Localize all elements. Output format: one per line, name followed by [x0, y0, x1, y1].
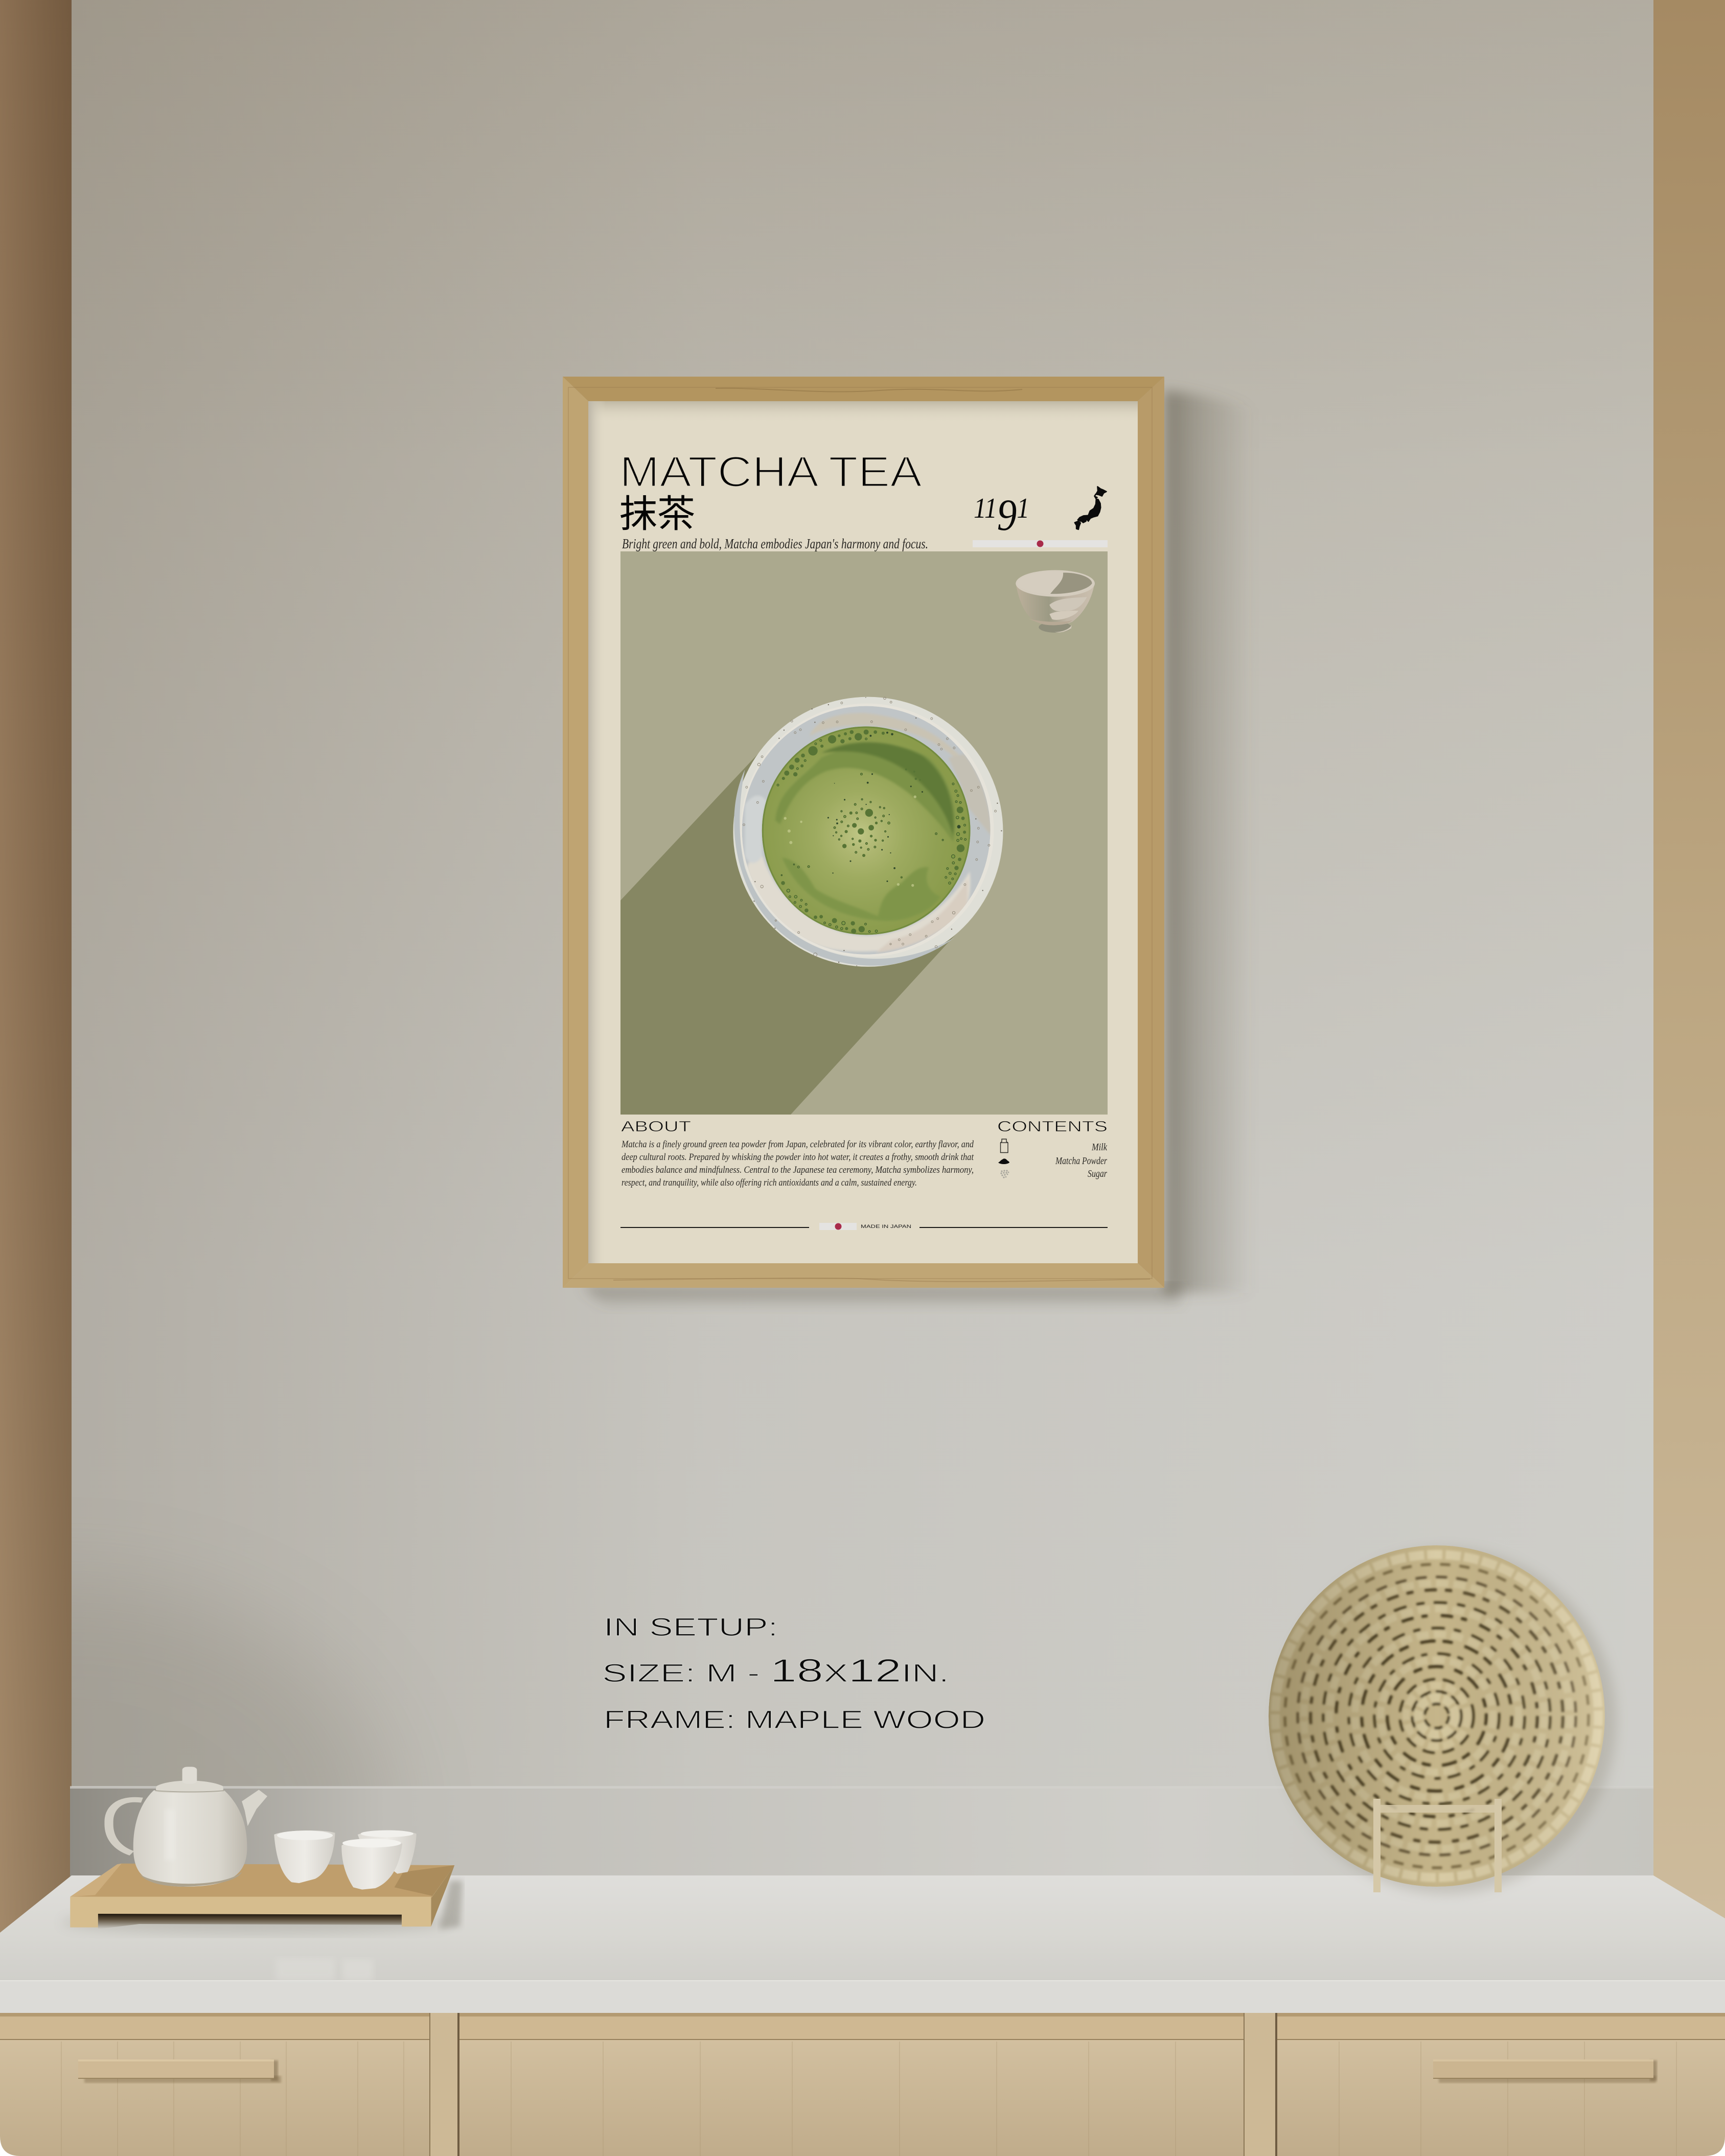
about paragraph: embodies balance and mindfulness. Central to the Japanese tea ceremony, Matcha symbolizes harmony,	[622, 1165, 974, 1175]
backsplash	[70, 1786, 1653, 1877]
contents heading: CONTENTS	[997, 1119, 1108, 1135]
woven basket	[1245, 1524, 1628, 1908]
icon: side view bowl	[1016, 570, 1095, 633]
bowl inner well	[742, 706, 992, 955]
contents list: Milk	[1091, 1142, 1108, 1153]
setup caption: FRAME: MAPLE WOOD	[604, 1705, 985, 1734]
right wooden pillar	[1653, 0, 1725, 1918]
bottom rounded corners	[0, 2136, 1725, 2156]
teapot	[109, 1767, 267, 1887]
about paragraph: respect, and tranquility, while also offering rich antioxidants and a calm, sustained energy.	[622, 1177, 917, 1188]
year: 11	[974, 493, 1000, 524]
left wooden pillar	[0, 0, 72, 1933]
about paragraph	[621, 1139, 974, 1188]
wooden picture frame	[563, 377, 1164, 1288]
tagline: Bright green and bold, Matcha embodies Japan's harmony and focus.	[622, 536, 928, 551]
tray shadow	[61, 1881, 463, 1934]
icon: matcha powder	[998, 1158, 1009, 1164]
title: MATCHA TEA	[619, 448, 922, 496]
icon: milk bottle	[1001, 1139, 1008, 1153]
japanese flag bar	[973, 540, 1108, 547]
countertop	[0, 1875, 1725, 2013]
setup caption: IN SETUP:	[604, 1613, 778, 1641]
about heading: ABOUT	[621, 1119, 691, 1135]
matcha bowl top view	[733, 697, 1003, 967]
left door handle	[78, 2059, 281, 2083]
poster paper	[588, 401, 1138, 1263]
footer flag	[819, 1223, 857, 1230]
tea cups	[274, 1830, 417, 1890]
tea tray	[70, 1864, 454, 1929]
made in japan label: MADE IN JAPAN	[861, 1224, 911, 1230]
right door handle	[1433, 2059, 1657, 2083]
teapot spout	[242, 1790, 267, 1826]
footer rule left	[620, 1227, 809, 1228]
contents list: Sugar	[1088, 1168, 1107, 1179]
bowl outer rim	[733, 697, 1003, 967]
japanese title: 抹茶	[619, 483, 695, 538]
matcha surface	[762, 726, 971, 935]
footer rule right	[919, 1227, 1108, 1228]
setup caption	[602, 1613, 985, 1734]
year: 9	[997, 491, 1017, 540]
cabinet	[0, 2013, 1725, 2156]
bowl speckles	[743, 697, 1002, 966]
foam bubbles	[777, 730, 967, 934]
illustration panel	[620, 551, 1108, 1115]
about paragraph: Matcha is a finely ground green tea powder from Japan, celebrated for its vibrant color, earthy flavor, and	[621, 1139, 974, 1150]
basket stand	[1373, 1799, 1502, 1892]
year: 1	[1017, 493, 1029, 524]
frame shadow	[583, 390, 1252, 1309]
icon: sugar	[1000, 1170, 1009, 1178]
long shadow	[620, 752, 957, 1115]
contents list: Matcha Powder	[1055, 1155, 1107, 1167]
contents list	[1055, 1142, 1108, 1179]
about paragraph: deep cultural roots. Prepared by whisking the powder into hot water, it creates a frothy, smooth drink that	[622, 1152, 974, 1163]
setup caption: SIZE: M - 18 X12 IN.	[602, 1652, 949, 1689]
teapot handle	[109, 1800, 142, 1853]
icon: japan map	[1075, 486, 1107, 529]
